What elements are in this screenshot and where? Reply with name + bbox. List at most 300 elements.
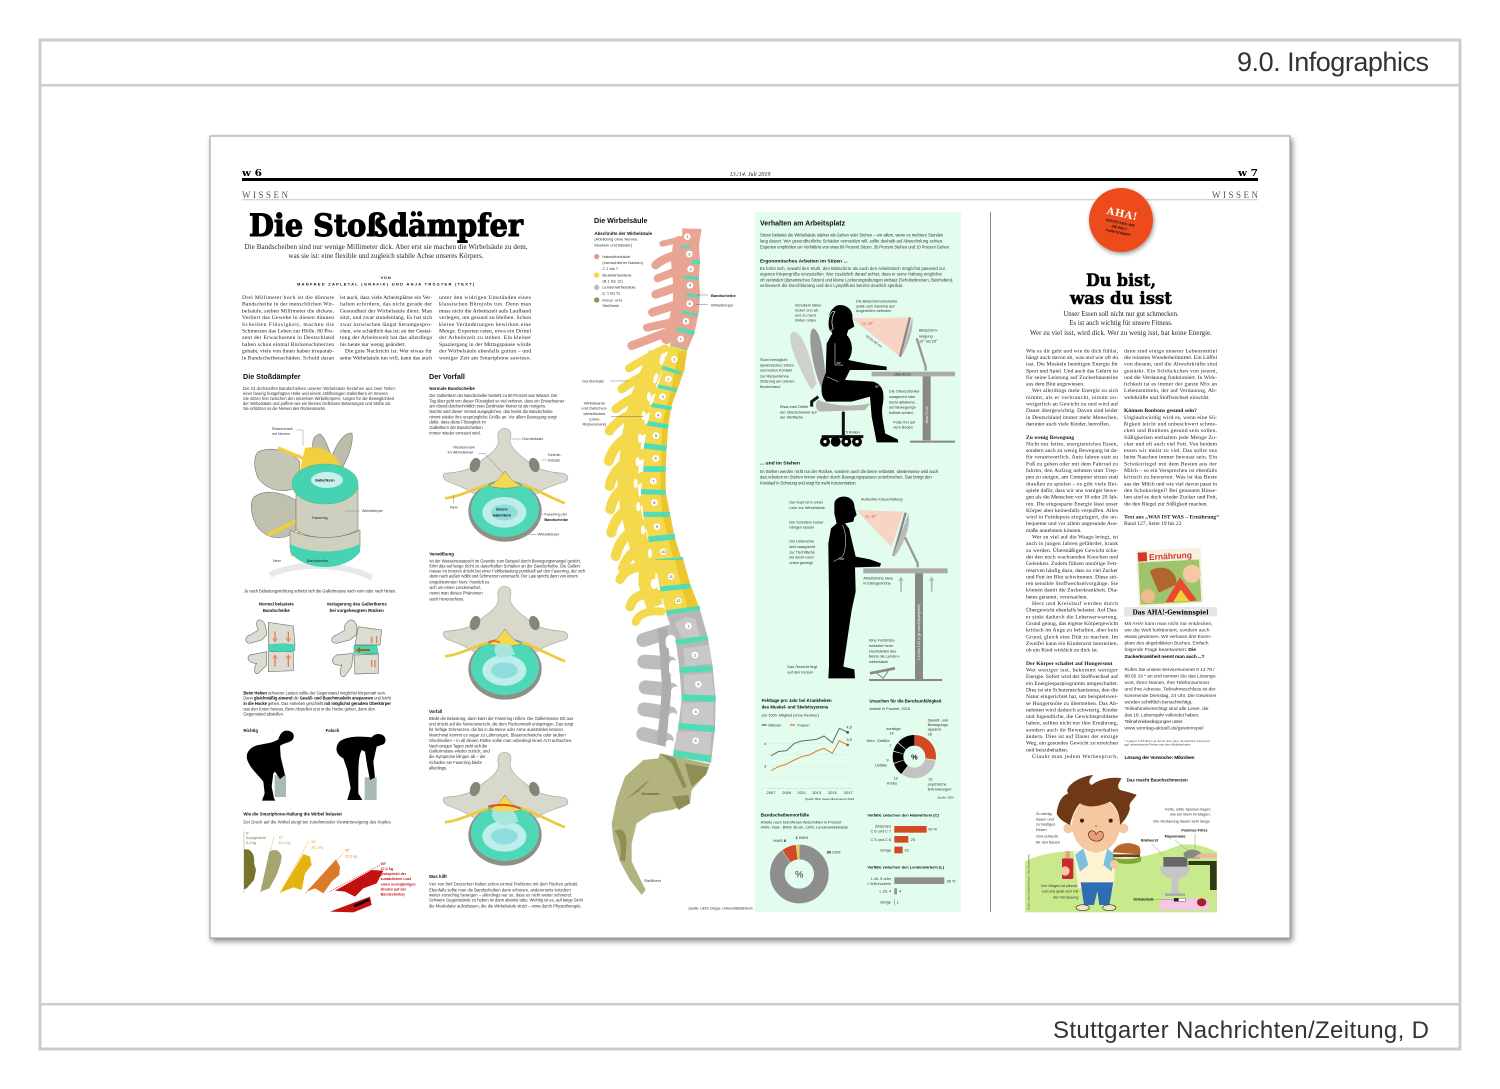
illustration: standing posture: Hochstellen des	[869, 649, 896, 653]
normal disc text: Der Gallertkern der Bandscheibe besteht zu 80 Prozent aus Wasser. Der	[429, 393, 558, 398]
silhouette: wrong posture: Falsch	[326, 728, 340, 733]
chart: sick days line chart: Fehltage pro Jahr bei Krankheiten	[762, 698, 832, 703]
spine labels: (ohne	[589, 416, 600, 421]
intro text columns: Verliert das Gewebe in diesen dünnen	[242, 315, 334, 321]
grill and food: Pommes Frites	[1181, 828, 1208, 832]
spine: thoracic vertebrae 1-10: 2	[667, 376, 670, 381]
chart: causes of occupational disability: Unfälle	[875, 764, 887, 768]
vertebra: bulging disc	[443, 586, 568, 700]
chart: cervical herniations: 25	[911, 838, 915, 842]
subheading: standing: ... und im Stehen	[760, 460, 800, 466]
competition text: etwas gewinnen. Wir verlosen drei Exem-	[1124, 634, 1212, 640]
chart: sick days line chart: 2015	[828, 790, 838, 795]
vertebra: normal disc: im Wirbelkanal	[448, 451, 473, 455]
illustration: sitting posture: dem Boden	[893, 425, 913, 429]
intro text columns: seine Wirbelsäule tun will, kann das auch	[340, 355, 432, 361]
illustration: standing posture: Die Unterarme	[789, 540, 814, 544]
page header strip: w 6	[241, 169, 262, 179]
explanatory text: Sie schützen so die Nerven des Rückenmarks.	[243, 406, 326, 411]
article column 1: Herz und Kreislauf werden durch	[1032, 600, 1118, 607]
explanatory text: Sie sitzen fest zwischen den einzelnen Wirbelkörpern, sorgen für die Beweglichkeit	[243, 396, 395, 401]
normal disc text	[429, 386, 565, 435]
heading: Die Wirbelsäule	[594, 216, 647, 225]
legend: spine sections: Halswirbelsäule	[602, 254, 631, 259]
article column 1: draußen zu spielen – es gibt viele Bei-	[1026, 480, 1118, 487]
illustration: sitting posture: hinten rollen	[795, 319, 816, 323]
illustration: standing posture: in Ellbogenhöhe	[863, 582, 891, 586]
spine labels: Wirbelkanal	[584, 400, 605, 405]
lower left column: disc load, lifting, smartphone posture	[243, 589, 416, 912]
illustration: sitting posture: der Oberschenkel auf	[780, 410, 818, 414]
illustration: sitting posture: freiheit achten.	[889, 411, 914, 415]
article column 2: ßigkeit leicht und unbeschwert schme-	[1124, 420, 1217, 428]
competition text: 88 65 19 * an und nennen Sie das Lösungs-	[1124, 674, 1217, 680]
herniation text: Bleibt die Belastung, dann kann der Faserring reißen. Die Gallertmasse tritt aus	[429, 716, 573, 721]
intro text: Sitzen belastet die Wirbelsäule stärker als Gehen oder Stehen – vor allem, wenn es mehrere Stunden	[760, 233, 944, 238]
spine: cervical vertebrae: 6	[685, 319, 688, 324]
panel: Verhalten am Arbeitsplatz	[755, 212, 961, 912]
article column 1: für verantwortlich. Auto fahren statt zu	[1026, 454, 1118, 461]
illustration: standing posture: ca. 30°	[865, 514, 877, 518]
caption: load: Je nach Belastungsrichtung schiebt sich die Gallertmasse nach vorn oder nach hinten.	[244, 589, 396, 594]
spine: thoracic vertebrae 1-10: 1	[673, 357, 676, 362]
intro text columns: klassischen Bürojobs tun. Denn man	[439, 302, 531, 308]
chart: causes of occupational disability: Ursachen für die Berufsunfähigkeit	[869, 698, 942, 703]
legend: spine sections: (L 1 bis 5)	[602, 291, 621, 296]
book cover: Ernährung: Ernährung	[1149, 550, 1192, 562]
smartphone posture heading: Wie die Smartphone-Haltung die Wirbel belastet	[243, 811, 342, 816]
chart: head inclination: Kopfgewicht	[246, 836, 266, 840]
intro text columns: belsäule, sieben Millimeter die dickste.	[242, 308, 335, 314]
chart: sick days line chart	[762, 698, 854, 801]
lifting text: Beim Heben schwerer Lasten sollte der Gegenstand möglichst körpernah sein.	[243, 690, 386, 695]
intro text columns: zwar inzwischen längst herumgespro-	[340, 322, 432, 328]
callouts: kauen und	[1036, 817, 1054, 821]
herniation text: für heftige Schmerzen, die bis in die Beine oder Arme ausstrahlen können.	[429, 727, 564, 732]
spine labels: Dornfortsatz	[582, 379, 604, 384]
intro text columns: halten erfordern, das nicht gerade der	[340, 301, 432, 308]
chart: disc herniation donut	[761, 813, 848, 896]
article column 1: hängt auch davon ab, was und wie oft du	[1026, 354, 1118, 361]
chart: causes of occupational disability: Krebs	[887, 782, 897, 786]
normal disc text: nimmt wieder ihre ursprüngliche Größe an. Vor allem Bewegung sorgt	[429, 414, 558, 419]
illustration: standing posture: sind waagrecht	[789, 545, 816, 549]
intro text columns: unter den widrigen Umständen eines	[439, 295, 531, 301]
callouts: Der Magen ist pitschi-	[1041, 884, 1079, 888]
spine labels	[581, 293, 737, 427]
spine: lumbar vertebrae: 4	[695, 709, 698, 714]
column rule	[990, 212, 991, 912]
chart: head inclination: 27,2 kg	[381, 867, 393, 871]
illustration: standing posture: Die Schultern locker	[789, 520, 824, 524]
legend: spine sections: Lendenwirbelsäule	[602, 285, 636, 290]
article column 2: gestärkt. Ein Schlückchen von jenem,	[1124, 368, 1218, 374]
article column 1: wird in Fettdepots eingelagert, die un-	[1026, 515, 1118, 521]
sitting text: oft verändert (dynamisches Sitzen) und kleine Lockerungsübungen einbaut (Schulterkreisen, Beinheben),	[760, 277, 953, 282]
chart: disc herniation donut: 90 LWS	[827, 850, 841, 855]
article column 2: Text aus „WAS IST WAS – Ernährung“	[1124, 515, 1219, 521]
illustration: sitting posture: auf Bewegungs-	[889, 406, 917, 410]
article column 1: ren. Die eingesparte Energie lässt unser	[1026, 501, 1118, 507]
article column 1: Wer allerdings mehr Energie zu sich	[1032, 388, 1118, 394]
panel: Der Vorfall	[429, 372, 586, 908]
illustration: sitting posture: etwa 72 cm	[925, 406, 929, 423]
banner: Das AHA!-Gewinnspiel	[1124, 607, 1217, 616]
article column 1: isst. Die Muskeln benötigen Energie für	[1026, 361, 1118, 368]
spine: lumbar vertebrae: 3	[697, 682, 700, 687]
illustration: sitting posture: der Sitzfläche	[780, 416, 803, 420]
what helps text: Ebenfalls sollte man die Bandscheiben dann schonen, andererseits trotzdem	[429, 887, 571, 892]
herniation text: allerdings.	[429, 766, 447, 771]
article column 2: essen wir meist zu viel. Das sollte uns	[1124, 448, 1217, 454]
article column 1: maße annehmen können.	[1026, 527, 1082, 534]
illustration: sitting posture: Etwa zwei Drittel	[780, 405, 808, 409]
chart: lumbar herniations	[867, 865, 956, 905]
article column 1: ren sensible Stoffwechselvorgänge. Sie	[1026, 580, 1119, 587]
article column 1: Zu wenig Bewegung	[1026, 435, 1074, 441]
article column 1: spiele dafür, dass wir uns weniger bewe-	[1026, 487, 1118, 494]
intro text columns	[242, 295, 532, 361]
callouts: wie ein Stein im Magen.	[1170, 813, 1211, 817]
sitting text: eigenen Körpergröße einzustellen. Wer zusätzlich darauf achtet, dass er seine Haltung möglichst	[760, 271, 943, 276]
title: Du bist, was du isst: Du bist,	[1086, 271, 1156, 291]
newspaper page	[210, 136, 1290, 938]
chart: lumbar herniations: übrige	[880, 900, 891, 904]
article column 1: nehmen wird dadurch schwierig. Kinder	[1026, 707, 1118, 713]
bulge text: führt das auf lange Sicht zu dauerhaften Schäden an der Bandscheibe. Die Gallert-	[429, 564, 582, 569]
intro text columns: haben schon einmal Rückenschmerzen	[242, 342, 334, 348]
spine: cervical vertebrae: 1	[686, 234, 689, 239]
callouts: der Verdauung	[1053, 895, 1078, 899]
bulge text: auch Hexenschuss.	[429, 596, 464, 601]
diagram: normal loaded disc: Bandscheibe	[263, 608, 290, 613]
illustration: vertebrae with disc: mit Nerven	[272, 432, 290, 436]
illustration: sitting posture: Füße frei auf	[893, 420, 916, 424]
competition text: wie die Welt funktioniert, sondern auch	[1124, 628, 1210, 634]
normal disc text: Nachts wird dieser Verlust ausgeglichen, das heisst die Bandscheibe	[429, 409, 553, 414]
chart: sick days line chart: pro 1000. Mitglied (ohne Rentner)	[762, 714, 820, 718]
chart: disc herniation donut: HWS 8	[773, 838, 787, 843]
standing text: Im Stehen werden nicht nur der Rücken, sondern auch die Beine entlastet. Idealerweise wird auch	[760, 469, 939, 474]
article column 1: kritisch im Auge zu behalten, aber kein	[1026, 628, 1118, 634]
competition text: werden schriftlich benachrichtigt.	[1124, 700, 1192, 706]
vertebra: herniated disc	[443, 752, 568, 866]
subtitle	[244, 243, 528, 260]
sitting text: verbessert die Durchblutung und den Lymphfluss bereits deutlich spürbar.	[760, 283, 903, 288]
illustration: sitting posture: Stuhl ermöglicht	[760, 358, 788, 362]
article column 2: Schokoriegel mit dem Besten aus der	[1124, 461, 1217, 467]
badge: AHA!: AHA!	[1105, 206, 1139, 223]
chart: cervical herniations: 15	[904, 849, 909, 853]
intro text	[760, 233, 950, 250]
spine: cervical vertebrae: 3	[690, 266, 693, 271]
article column 2: cker und oft auch viel Fett. Von beidem	[1124, 440, 1218, 447]
chart: cervical herniations: C 5 und C 6	[871, 838, 891, 842]
chart: sick days line chart: Männer	[768, 723, 782, 727]
article column 2: Lebensmitteln, der auf Verdauung, Ab-	[1124, 387, 1217, 394]
chart: cervical herniations	[867, 813, 939, 853]
illustration: sitting posture: zur Rückenlehne.	[760, 374, 790, 378]
article column 1: Sport und Spiel. Und auch das Gehirn ist	[1026, 368, 1118, 374]
title: Die Stoßdämpfer: Die Stoßdämpfer	[249, 208, 524, 244]
intro text columns: tung der Arbeitswelt hat das allerdings	[340, 335, 432, 341]
chart: lumbar herniations: 96 %	[947, 879, 956, 883]
chart: causes of occupational disability: Quelle: DEV	[937, 796, 954, 800]
chart: sick days line chart: 2009	[782, 790, 792, 795]
legend: spine sections: (menschlicher Nacken)	[602, 260, 644, 265]
herniation text: Nach einigen Tagen zieht sich die	[429, 743, 488, 748]
spine: thoracic vertebrae 1-10: 7	[652, 478, 655, 483]
boy	[1057, 775, 1137, 911]
legend: spine sections: Steißbein	[602, 303, 619, 308]
vertebra: normal disc: Nerv	[450, 505, 458, 509]
legend: spine sections: (B 1 bis 12)	[602, 278, 623, 283]
intro text columns: Spaziergang in der Mittagspause würde	[439, 342, 532, 348]
vertebra: normal disc: Dornfortsatz	[522, 437, 543, 441]
chart: head inclination: 30°	[311, 840, 317, 844]
illustration: standing posture: bis leicht nach	[789, 556, 814, 560]
illustration: sitting posture: waagrecht oder	[889, 395, 916, 399]
illustration: standing posture: Arbeitshöhe etwa	[863, 576, 894, 580]
chart: causes of occupational disability: sonstige	[886, 727, 901, 731]
spine: thoracic vertebrae 11-12: 12	[676, 599, 680, 603]
spine: thoracic vertebrae 1-10: 8	[653, 500, 656, 505]
header label: 9.0. Infographics	[1237, 47, 1429, 77]
article column 1: Weg, ein gesundes Gewicht zu erreichen	[1026, 741, 1118, 747]
illustration: standing posture: wirbelsäule	[869, 660, 888, 664]
competition text: Zuckerkrankheit nennt man auch ...?	[1124, 654, 1204, 660]
footer label: Stuttgarter Nachrichten/Zeitung, D	[1053, 1017, 1429, 1044]
chart: sick days line chart: 4	[764, 741, 767, 746]
illustration: sitting posture: und zu nach	[795, 314, 816, 318]
spine: sacrum and coccyx: Kreuzbein	[642, 791, 660, 796]
article column 1: bequeme und vor allem ungesunde Aus-	[1026, 521, 1118, 527]
callouts: sind schlecht	[1036, 835, 1059, 839]
explanatory text: Die 23 drehsteifen Bandscheiben unserer Wirbelsäule bestehen aus zwei Teilen:	[243, 386, 396, 391]
callouts: Fette, süße Speisen liegen	[1165, 807, 1211, 811]
sitting text	[760, 266, 953, 288]
article column 1: und Fett im Blut schwimmen. Diese stö-	[1026, 574, 1118, 580]
chart: cervical herniations: übrige	[880, 848, 891, 852]
chart: causes of occupational disability: %	[911, 752, 918, 761]
legend: spine sections: (Abbildung ohne Nerven,	[594, 237, 638, 242]
vertebra: normal disc: Bandscheibe	[544, 518, 568, 522]
legend: spine sections: Kreuz- und	[602, 297, 622, 302]
spine: thoracic vertebrae 1-10: 5	[655, 433, 658, 438]
article column 1: ein Energiesparprogramm umgeschaltet.	[1026, 681, 1119, 687]
chart: lumbar herniations: 4	[899, 890, 902, 894]
vertebra: normal disc: Rückenmark	[453, 445, 475, 449]
chart: lumbar herniations: Vorfälle zwischen den Lendenwirbeln (L)	[867, 865, 945, 870]
article column 1: Natur eingerichtet hat, um beispielswei-	[1026, 694, 1118, 700]
spine: lumbar vertebrae	[643, 610, 716, 763]
chart: sick days line chart: 3	[764, 763, 767, 768]
illustration: vertebrae with disc: Bandscheibe	[307, 559, 328, 563]
lifting text: aus den Knien heraus. Beim Abstellen erst in die Hocke gehen, dann den	[243, 706, 376, 711]
spine: thoracic vertebrae 1-10: 4	[657, 412, 660, 417]
bulge text: nennt man dieses Phänomen	[429, 591, 483, 596]
article column 1: darunter auch viele Kinder, betroffen.	[1026, 420, 1111, 428]
article column 1: und beizubehalten.	[1026, 747, 1069, 753]
herniation text: und drückt auf die Nervenwurzeln, die dem Rückenmark entspringen. Das sorgt	[429, 722, 574, 727]
intro text columns: gehabt, viele von ihnen haben irreparab-	[242, 349, 334, 355]
subtitle: Unser Essen soll nicht nur gut schmecken.	[1063, 311, 1179, 318]
herniation text	[429, 709, 574, 771]
intro text columns: Die gute Nachricht ist: Wer etwas für	[345, 348, 432, 355]
page header strip: 13./14. Juli 2019	[730, 171, 770, 178]
competition text: * Legion 0,50 Euro je Anruf aus dem deutschen Festnetz;	[1124, 739, 1211, 743]
what helps text: die Muskulatur aufzubauen, die die Wirbelsäule stützt – etwa durch Physiotherapie.	[429, 903, 582, 908]
herniation text: Vorfall	[429, 709, 442, 714]
legend: spine sections: C 1 bis 7	[602, 266, 619, 271]
article column 2: Können Bonbons gesund sein?	[1124, 408, 1197, 414]
normal disc text: immer wieder erneuert wird.	[429, 430, 481, 435]
illustration: standing posture: Der Kopf ist in einer	[789, 500, 824, 504]
article column 1: können damit die Zuckerkrankheit, Dia-	[1026, 588, 1118, 594]
spine: cervical vertebrae: 7	[680, 336, 683, 341]
chart: causes of occupational disability: Bewegungs-	[928, 723, 950, 727]
illustration: standing posture: auf den Fersen	[787, 670, 813, 674]
intro text columns: verlegen, um gesund zu bleiben. Schon	[439, 315, 531, 321]
intro text: lang dauert. Wer gesundheitliche Schäden vermeiden will, sollte deshalb auf Abwechslung achten.	[760, 239, 943, 244]
intro text columns: Bandscheibe in der menschlichen Wir-	[242, 302, 334, 308]
spine labels: Bandscheibe	[711, 293, 737, 298]
vertebra: normal disc	[443, 428, 568, 542]
vertebra: normal disc: Gallertkern	[493, 514, 511, 518]
chart: causes of occupational disability: 10	[894, 776, 898, 780]
panel: Die Stoßdämpfer	[243, 372, 396, 578]
illustration: sitting posture: Die Bildschirmoberkante	[856, 299, 897, 303]
badge: AHA!: FUNKTIONIERT	[1106, 228, 1132, 237]
illustration: sitting posture: Bildschirm-	[919, 329, 939, 333]
spine labels: wirbelloches	[583, 411, 605, 416]
intro text columns: kleine Veränderungen bewirken eine	[439, 322, 532, 328]
competition text: Teilnahmeberechtigt sind alle Leser, die	[1124, 706, 1209, 712]
lifting text: in die Hocke gehen. Das Anheben geschieht mit möglichst geradem Oberkörper	[243, 701, 391, 706]
diagram: normal loaded disc	[246, 601, 295, 674]
spine: cervical vertebrae: 2	[688, 251, 691, 256]
illustration: sitting posture: 5 Rollen	[846, 431, 860, 435]
intro text columns: bis heute nur wenig geändert.	[340, 342, 407, 348]
spine: thoracic vertebrae 11-12	[620, 560, 700, 622]
article column 2: Milch – so ein Versprechen ist ebenfalls	[1124, 467, 1217, 474]
spine: thoracic vertebrae 1-10: 6	[655, 456, 658, 461]
callouts: Essen	[1036, 828, 1047, 832]
callouts: zu hastiges	[1036, 823, 1055, 827]
badge: AHA!: ENTDECKEN, WIE	[1106, 218, 1136, 228]
article column 2: den Schokoriegel? Bei genauem Hinse-	[1124, 488, 1217, 494]
intro text columns: ist auch, dass viele Arbeitsplätze ein Ver-	[340, 295, 432, 301]
article column 1: und Jugendliche, die Gewichtsprobleme	[1026, 714, 1119, 720]
article column 1: Fuß zu gehen oder mit dem Fahrrad zu	[1026, 460, 1118, 467]
competition text: Lösung der Vorwoche: Mikroben	[1124, 755, 1194, 761]
panel: Die Wirbelsäule	[581, 216, 753, 910]
chart: sick days line chart: 2011	[797, 790, 807, 795]
spine: thoracic vertebrae 1-10: 10	[661, 549, 666, 554]
subtitle: Die Bandscheiben sind nur wenige Millimeter dick. Aber erst sie machen die Wirbelsäule zu dem,	[244, 243, 528, 251]
grill and food: Mayonnaise	[1165, 835, 1186, 839]
illustration: sitting posture: Schultern fallen	[795, 304, 821, 308]
article column 1: Wer weniger isst, bekommt weniger	[1026, 668, 1118, 674]
sitting text: Es lohnt sich, sowohl den Stuhl, den Bildschirm als auch den Arbeitstisch möglichst passend zur	[760, 266, 946, 271]
chart: causes of occupational disability: psychische	[928, 782, 947, 786]
illustration: vertebrae with disc: Wirbelkörper	[362, 509, 384, 513]
chart: head inclination: 45°	[345, 848, 351, 852]
chart: disc herniation donut: HWS: Hals-, BWS: Brust-, LWS: Lendenwirbelsäule	[761, 826, 848, 830]
callouts	[1036, 807, 1211, 899]
grill and food: Bratwurst	[1141, 838, 1159, 842]
article column 2: Band 127, Seite 19 bis 22	[1124, 521, 1182, 527]
illustration: sitting posture: 90°	[875, 384, 880, 388]
article column 1: ändern. Dies ist auf Dauer der einzige	[1026, 733, 1119, 740]
chart: sick days line chart: 2017	[844, 790, 854, 795]
page header strip	[241, 169, 1259, 200]
spine labels: Rückenmark)	[582, 422, 607, 427]
spine labels: und Zwischen-	[581, 406, 608, 411]
herniation text: Gallertmasse wieder zurück, und	[429, 749, 490, 754]
grill and food: Schokolade	[1133, 898, 1154, 902]
illustration: sitting posture: 10° bis 25°	[919, 339, 938, 343]
chart: disc herniation donut: Bandscheibenvorfälle	[761, 813, 809, 818]
chart: causes of occupational disability: Anteile in Prozent, 2016	[869, 707, 910, 711]
illustration: standing posture: Linie zur Wirbelsäule	[789, 506, 825, 510]
burger	[1110, 843, 1142, 869]
chart: cervical herniations: Zwischen	[875, 824, 891, 828]
lifting text: Gegenstand abstellen.	[243, 712, 284, 717]
illustration: vertebrae with disc: Gallertkern	[315, 478, 335, 482]
intro text columns: zent der Erwachsenen in Deutschland	[242, 335, 334, 341]
spine: lumbar vertebrae: 2	[694, 652, 697, 657]
illustration: sitting posture: 50 bis 60 cm	[865, 334, 883, 349]
vertebra: normal disc: Faserring der	[544, 513, 568, 517]
illustration: sitting posture: leicht abfallend,	[889, 400, 916, 404]
badge: AHA!	[1089, 188, 1153, 252]
article column 1: se Hungersnöte zu überstehen. Das Ab-	[1026, 701, 1118, 707]
diagram: shifted nucleus	[327, 601, 387, 676]
explanatory text: der Wirbelsäule und puffern wie ein kleines Gelkissen Belastungen und Stöße ab.	[243, 401, 391, 406]
competition text	[1124, 621, 1217, 761]
competition text: ggf. abweichende Preise aus dem Mobilfunknetz	[1124, 742, 1191, 746]
illustration: standing posture: Beins die Lenden-	[869, 655, 901, 659]
intro text columns: Scheiben Flüssigkeit, machen die	[242, 322, 335, 328]
article column 1: Übergewicht ebenfalls belastet. Auf Dau-	[1026, 607, 1118, 614]
standing text: das Arbeiten im Stehen immer wieder durch Bewegungspausen unterbrochen. Das bringt den	[760, 475, 932, 480]
normal disc text: dafür, dass diese Flüssigkeit im	[429, 420, 487, 425]
spine: thoracic vertebrae 1-10: 9	[656, 524, 659, 529]
article column 2: die den Riegel zur Süßigkeit machen.	[1124, 500, 1208, 507]
chart: causes of occupational disability: 7	[889, 744, 891, 748]
article column 1: fahren, den Aufzug nehmen statt Trep-	[1026, 467, 1118, 474]
standing text	[760, 469, 939, 485]
diagram: normal loaded disc: Normal belastete	[259, 601, 294, 606]
competition text: plare des abgebildeten Buches. Einfach	[1124, 640, 1209, 646]
herniation text: Schaden am Faserring bleibt	[429, 760, 483, 765]
chart: head inclination: 5,4 kg	[246, 841, 256, 845]
heading: Die Stoßdämpfer	[243, 372, 301, 381]
illustration: vertebrae with disc: Rückenmark	[272, 427, 293, 431]
herniation text: Manchmal kommt es sogar zu Lähmungen, Blasenschwäche oder tauben	[429, 732, 566, 737]
what helps text	[429, 874, 584, 908]
article column 2: cken und Bonbons gesund sein sollen.	[1124, 428, 1218, 434]
callouts: Zu wenig	[1036, 812, 1052, 816]
illustration: vertebrae with disc: Nerv	[273, 559, 281, 563]
subtitle: Wer zu viel isst, wird dick. Wer zu wenig isst, hat keine Energie.	[1030, 330, 1212, 337]
title: Du bist, was du isst	[1069, 271, 1172, 309]
vertebra: normal disc: Wirbelkörper	[538, 533, 560, 537]
what helps text: Schwere Gegenstände zu heben ist dann absolut tabu. Wichtig ist es, auf lange Sicht	[429, 898, 584, 903]
chart: lumbar herniations: L 5/Kreuzbein	[868, 882, 891, 886]
article column 1: Grund, gleich eine Diät zu machen. Im	[1026, 634, 1119, 640]
